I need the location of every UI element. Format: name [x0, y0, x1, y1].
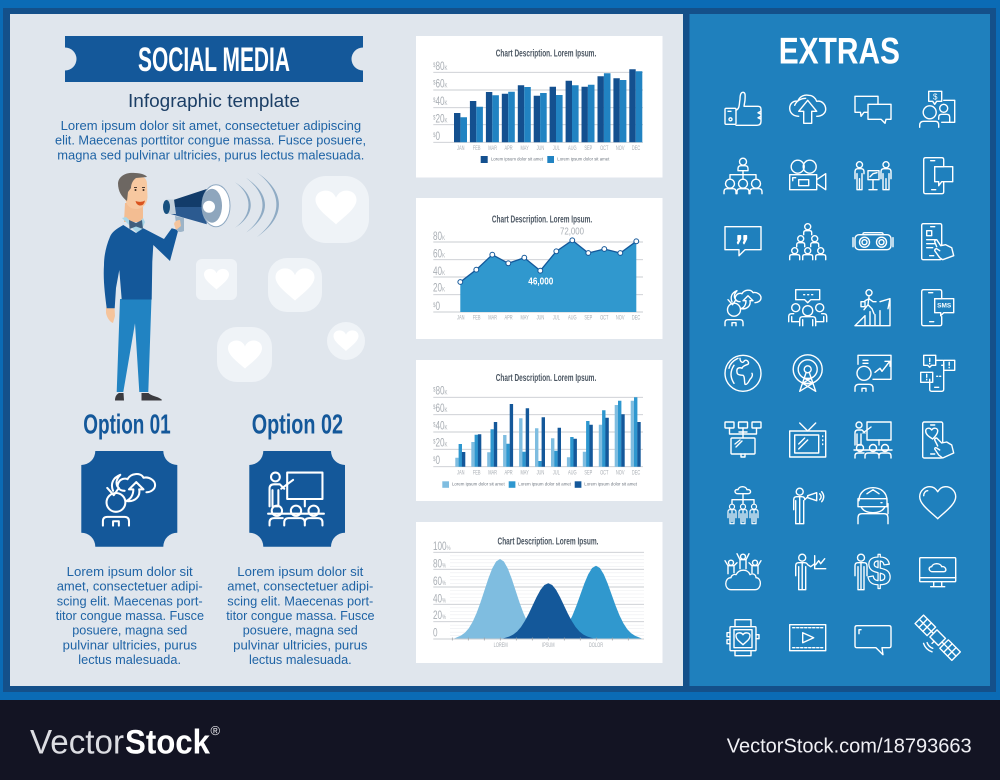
chart 3 month labels: FEB [473, 469, 481, 477]
chart 1 legend [481, 156, 610, 163]
chart 4 curve: ipsum [501, 583, 595, 639]
chart 4 y axis labels: 0 [433, 627, 438, 640]
chart 3 month labels: NOV [616, 469, 625, 477]
icon: speech bubble [855, 626, 891, 655]
option 02 text: scing elit. Maecenas port- [227, 593, 373, 608]
icon: speaker with megaphone [794, 488, 824, 524]
icon: smartwatch with heart [727, 620, 759, 656]
chart 3 month labels: SEP [584, 469, 593, 477]
chart 3 title: Chart Description. Lorem Ipsum. [496, 373, 596, 384]
bow tie [129, 220, 143, 229]
chart 3 month labels: JUN [537, 469, 544, 477]
icon: phone with sms [922, 290, 954, 326]
chart 3 legend: Lorem ipsum dolor sit amet [518, 481, 572, 486]
icon: paid consultation [920, 91, 955, 127]
chart 1 y axis labels: K [445, 118, 448, 125]
chart 2 month labels: SEP [584, 314, 593, 322]
chart 1 month labels: FEB [473, 145, 481, 152]
intro text block [55, 118, 366, 162]
chart 2 y axis labels: 20K [433, 282, 445, 295]
chart 3 month labels: DEC [632, 469, 640, 477]
chart 1 y axis labels: $ [433, 80, 435, 87]
chart 1 y axis labels: 0 [435, 131, 440, 144]
chart 1 y axis labels: K [445, 100, 448, 107]
intro text block: elit. Maecenas porttitor congue massa. Fusce posuere, [55, 133, 366, 148]
collar [122, 217, 145, 232]
chart 1 month labels: AUG [568, 145, 577, 152]
chart 3 legend: Lorem ipsum dolor sit amet [452, 481, 505, 486]
chart 3 y axis labels: 40 [435, 420, 445, 433]
icon: person with graph [796, 554, 826, 590]
option 02 [226, 408, 375, 667]
chart 2 y axis labels [433, 231, 445, 314]
chart 1 y axis labels: $ [433, 115, 435, 122]
chart 3 y axis labels: 80 [435, 385, 445, 398]
icon: broadcast tower [793, 355, 822, 391]
extras heading: EXTRAS [779, 30, 900, 71]
icon: phone with alerts [921, 355, 955, 391]
chart 1 month labels: NOV [616, 145, 625, 152]
chart 3 legend: Lorem ipsum dolor sit amet [584, 481, 638, 486]
chart 1 dark bars [454, 69, 636, 142]
pants [117, 298, 152, 392]
chart 2 line [460, 240, 636, 282]
chart 1 y axis labels: 40 [435, 96, 445, 109]
chart 3 y axis labels: 20 [435, 437, 445, 450]
option 02 text: lectus malesuada. [249, 652, 352, 667]
icon: meeting at table [855, 162, 891, 190]
chart 1 y axis labels: 80 [435, 61, 445, 74]
chart 1 y axis labels: K [445, 83, 448, 90]
option 01 text: pulvinar ultricies, purus [63, 637, 197, 652]
chart 4 category labels: DOLOR [589, 642, 603, 649]
eyes and mouth [134, 186, 145, 188]
chart 2 y axis labels: 40K [433, 266, 445, 279]
chart 3 y axis labels: $ [433, 456, 435, 463]
chart 1 y axis labels [433, 61, 448, 144]
neck [124, 203, 143, 222]
footer bar [0, 700, 1000, 780]
icon: vr goggles [853, 233, 893, 250]
chart 3 dark bars [462, 404, 641, 467]
chart 2 value 72,000: 72,000 [560, 226, 584, 238]
chart 2 month labels: JAN [457, 314, 465, 322]
chart 3 legend [442, 481, 638, 488]
option 01 [56, 408, 204, 667]
chart 2 y axis labels: 0 [435, 301, 440, 314]
hand [106, 308, 115, 323]
option 01 badge with icon [81, 451, 177, 547]
chart 3 y axis labels: K [445, 390, 448, 397]
option 01 text: amet, consectetuer adipi- [57, 579, 203, 594]
chart 1 legend: Lorem ipsum dolor sit amet [557, 157, 610, 162]
subtitle: Infographic template [128, 91, 300, 111]
chart 1 month labels: DEC [632, 145, 640, 152]
footer logo: Vector [30, 723, 124, 761]
icon: cloud team [728, 487, 758, 524]
chart 1 y axis labels: K [445, 65, 448, 72]
chart 1 title: Chart Description. Lorem Ipsum. [496, 48, 596, 60]
title banner: SOCIAL MEDIA [138, 41, 290, 79]
option 02 text: posuere, magna sed [243, 623, 358, 638]
intro text block: magna sed pulvinar ultricies, purus lectus malesuada. [57, 147, 364, 162]
chart 1 month labels: OCT [600, 145, 609, 152]
chart 2 month labels: JUL [553, 314, 560, 322]
chart 3 y axis labels: K [445, 425, 448, 432]
chart 2 y axis labels: 80K [433, 231, 445, 244]
chart 3 y axis labels: $ [433, 422, 435, 429]
option 02 badge with icon [249, 451, 345, 547]
chart 2 month labels [457, 314, 640, 322]
chart 3 y axis labels: $ [433, 439, 435, 446]
icon: phone with sms: SMS [937, 303, 952, 310]
icon: phone with heart and hand [923, 422, 954, 458]
option 01 text: lectus malesuada. [78, 652, 181, 667]
chart 1 y axis labels: $ [433, 62, 435, 69]
chart 1 month labels: MAR [488, 145, 497, 152]
chart 4 title: Chart Description. Lorem Ipsum. [498, 536, 599, 547]
chart 4 category labels: LOREM [494, 642, 508, 649]
icon: person with dollar [855, 548, 891, 595]
icon: person with dollar: $ [867, 548, 891, 595]
chart 4: bell curves [416, 522, 662, 663]
footer image id: VectorStock.com/18793663 [727, 736, 972, 758]
option 02 text: titor congue massa. Fusce [226, 608, 375, 623]
chart 3 y axis labels: 0 [435, 455, 440, 468]
chart 3 y axis labels: K [445, 442, 448, 449]
footer logo: Stock [125, 723, 211, 761]
option 02 text: Lorem ipsum dolor sit [237, 564, 364, 579]
chart 1 month labels: APR [504, 145, 513, 152]
chart 4 category labels [494, 642, 603, 649]
icon: desktop with cloud [920, 558, 956, 587]
chart 3 medium bars [459, 397, 637, 467]
chart 1: grouped bars by month [416, 36, 662, 178]
sweater [104, 225, 178, 308]
option 02 text [226, 564, 375, 667]
chart 4 y axis labels: 20% [433, 610, 446, 623]
icon: presenter with audience [854, 422, 892, 458]
chart 3 month labels: MAY [520, 469, 529, 477]
icon: person with chart board [855, 355, 891, 391]
chart 1 month labels: JUL [553, 145, 560, 152]
chart 1 y axis labels: 20 [435, 113, 445, 126]
megaphone [163, 185, 230, 232]
chart 2 title: Chart Description. Lorem Ipsum. [492, 215, 592, 226]
panel: extras icons [690, 14, 990, 686]
icon: television [790, 423, 826, 457]
option 01 text [56, 564, 204, 667]
chart 3 y axis labels: K [445, 407, 448, 414]
chart 2 month labels: DEC [632, 314, 640, 322]
icon: monitors network [725, 422, 761, 457]
icon: globe [725, 355, 761, 391]
icon: thumbs up [725, 92, 761, 125]
chart 2 area [460, 240, 636, 312]
chart 3 month labels: JUL [553, 469, 560, 477]
chart 2 y axis labels: $ [433, 302, 435, 309]
icon: quote bubble [725, 227, 761, 256]
chart 1 y axis labels: 60 [435, 78, 445, 91]
icon: video frame [790, 625, 826, 651]
chart 2 month labels: NOV [616, 314, 625, 322]
chart 1 y axis labels: $ [433, 132, 435, 139]
chart 4 y axis labels: 100% [433, 541, 451, 554]
chart 4 y axis labels: 40% [433, 593, 446, 606]
footer logo [30, 723, 220, 761]
icon: org chart [724, 158, 762, 194]
sound waves [235, 172, 279, 237]
option 01 text: titor congue massa. Fusce [56, 608, 204, 623]
illustration: man with megaphone [104, 172, 279, 400]
hair [118, 173, 147, 201]
chart 4 curve: lorem [453, 559, 547, 639]
chart 1 month labels: JUN [537, 145, 544, 152]
chart 3: three series bars [416, 360, 662, 501]
chart 3 y axis labels: 60 [435, 403, 445, 416]
footer logo: ® [210, 723, 220, 738]
icon: vr headset person [858, 488, 888, 524]
chart 2 month labels: FEB [473, 314, 481, 322]
chart 2 month labels: MAR [488, 314, 497, 322]
chart 2 month labels: OCT [600, 314, 609, 322]
chart 4 category labels: IPSUM [542, 642, 555, 649]
icon: satellite [908, 615, 960, 667]
chart 3 light bars [455, 401, 634, 467]
chart 1 month labels: SEP [584, 145, 593, 152]
icon: movie camera [790, 160, 826, 190]
chart 2 month labels: JUN [537, 314, 544, 322]
chart 3 month labels: MAR [488, 469, 497, 477]
chart 2 data points [458, 238, 639, 284]
face [125, 176, 148, 209]
icon: runner on growth chart [855, 290, 890, 326]
chart 2 y axis labels: 60K [433, 248, 445, 261]
icon: people pyramid [790, 224, 826, 260]
chart 4 curve: dolor [549, 566, 643, 639]
chart 3 month labels: OCT [600, 469, 609, 477]
icon: person with cloud [725, 290, 761, 326]
chart 4 y axis labels [433, 541, 451, 640]
icon: chat bubbles [855, 96, 891, 123]
chart 3 month labels: AUG [568, 469, 577, 477]
chart 2 month labels: AUG [568, 314, 577, 322]
chart 1 legend: Lorem ipsum dolor sit amet [491, 157, 544, 162]
option 01 heading: Option 01 [83, 408, 171, 439]
option 02 heading: Option 02 [252, 408, 343, 439]
icon: heart [920, 487, 956, 519]
panel: left main panel [10, 14, 683, 686]
option 01 text: posuere, magna sed [72, 623, 187, 638]
chart 3 month labels: JAN [457, 469, 465, 477]
chart 1 month labels: MAY [520, 145, 529, 152]
chart 4 y axis labels: 80% [433, 558, 446, 571]
icon: phone with touch [922, 224, 954, 260]
chart 1 light bars [460, 71, 642, 142]
chart 3 y axis labels: $ [433, 404, 435, 411]
chart 3 y axis labels [433, 385, 448, 468]
option 02 text: amet, consectetuer adipi- [227, 579, 373, 594]
title banner [65, 36, 363, 82]
icon: paid consultation: $ [933, 92, 938, 101]
chart 1 month labels [457, 145, 640, 152]
icon: team with speech bubble [789, 290, 827, 326]
chart 3 month labels [457, 469, 640, 477]
icon: phone with bubble [924, 158, 953, 194]
icon: cloud upload [790, 95, 826, 123]
chart 2 month labels: APR [504, 314, 513, 322]
chart 2: area chart [416, 198, 662, 339]
chart 2 month labels: MAY [520, 314, 529, 322]
chart 3 month labels: APR [504, 469, 513, 477]
intro text block: Lorem ipsum dolor sit amet, consectetuer adipiscing [61, 118, 361, 133]
chart 2 value 46,000: 46,000 [528, 275, 553, 287]
chart 3 y axis labels: $ [433, 387, 435, 394]
chart 1 month labels: JAN [457, 145, 465, 152]
option 01 text: Lorem ipsum dolor sit [67, 564, 193, 579]
option 01 text: scing elit. Maecenas port- [57, 593, 203, 608]
shoes [115, 393, 162, 400]
option 02 text: pulvinar ultricies, purus [233, 637, 368, 652]
icon: cloud with people [725, 554, 761, 590]
chart 4 y axis labels: 60% [433, 576, 446, 589]
chart 1 y axis labels: $ [433, 97, 435, 104]
floating like hearts [196, 176, 369, 382]
